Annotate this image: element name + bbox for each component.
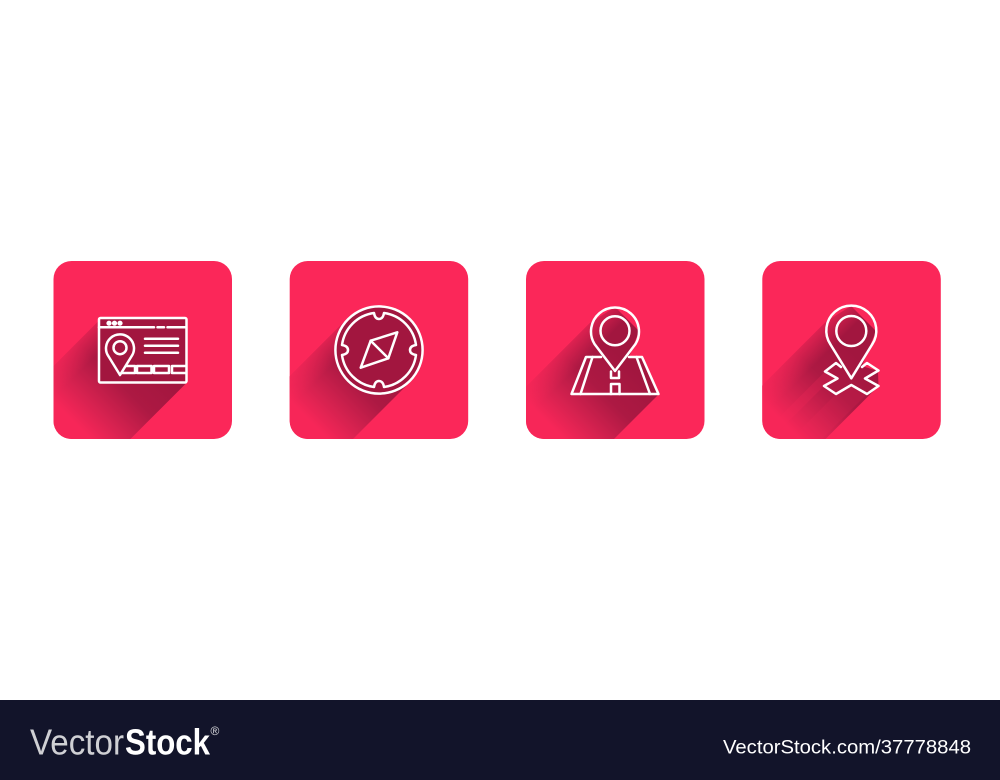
panel: map pin on X mark card: [762, 261, 941, 439]
panel: browser location card: [54, 261, 232, 439]
logo: VectorStock: ®: [210, 724, 220, 738]
panel: compass card: [290, 261, 468, 439]
logo: VectorStock: Stock: [125, 721, 211, 762]
logo: VectorStock: Vector: [30, 721, 124, 762]
long shadow: road map pin: [526, 308, 658, 439]
icon: map pin on road map: [572, 308, 658, 394]
image id text: VectorStock.com/37778848: [723, 737, 971, 758]
long shadow: browser icon: [54, 322, 186, 439]
long shadow: X mark pin: [762, 306, 878, 439]
panel: map pin on road map card: [526, 261, 704, 439]
logo: VectorStock: [30, 721, 220, 762]
icon: map pin with X mark: [824, 306, 878, 394]
long shadow: compass icon: [290, 322, 408, 439]
icon: compass: [335, 306, 423, 394]
icon: browser window with map pin: [99, 318, 186, 382]
footer bar: [0, 700, 1000, 780]
